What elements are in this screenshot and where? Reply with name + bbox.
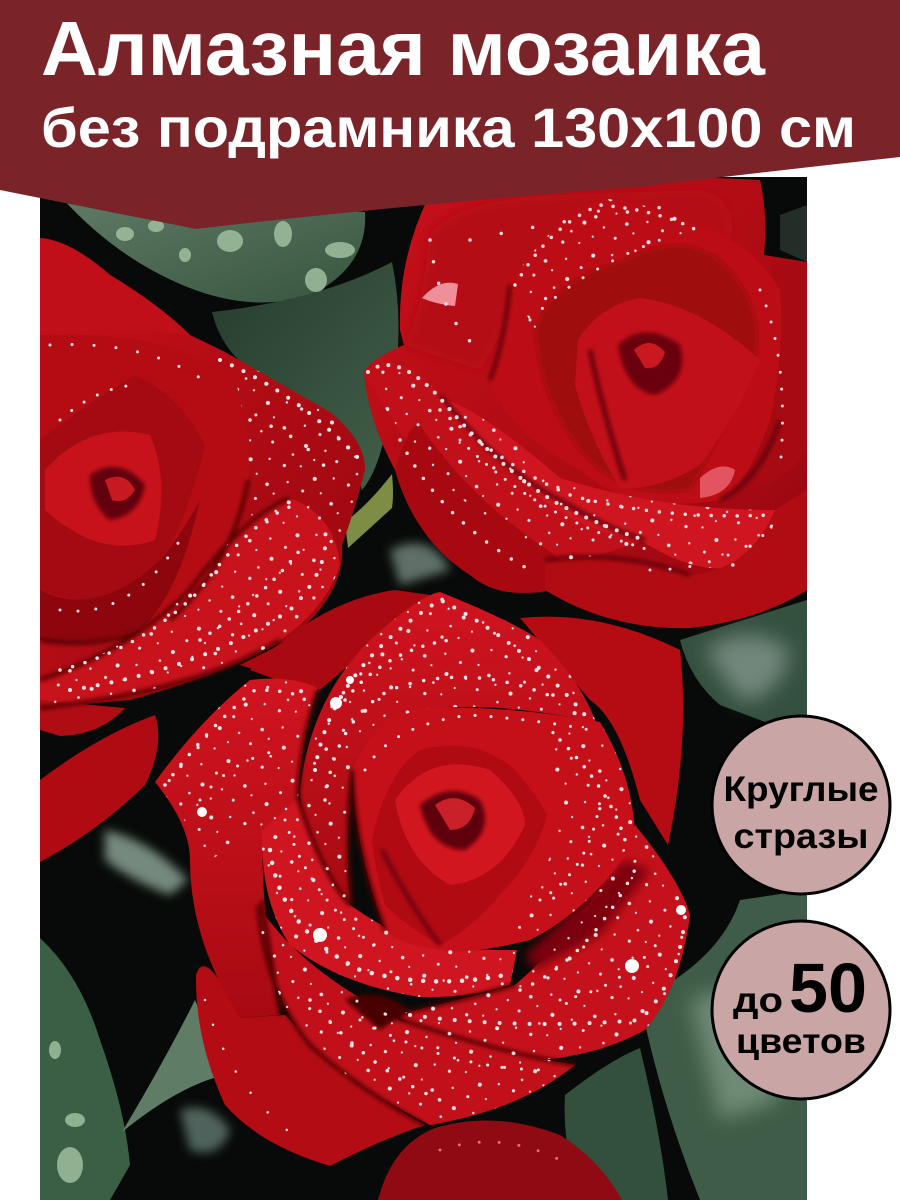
badge: round rhinestones xyxy=(712,716,890,894)
dew xyxy=(165,600,685,1140)
front petals xyxy=(364,363,645,560)
badge: round rhinestones: стразы xyxy=(734,817,868,856)
badge: up to 50 colours xyxy=(712,921,890,1099)
back left sliver xyxy=(240,590,430,690)
rose: bottom edge xyxy=(378,1120,622,1200)
title: Алмазная мозаика xyxy=(41,6,766,92)
bud xyxy=(372,746,547,945)
dew xyxy=(368,205,782,570)
dew speckle xyxy=(364,198,775,568)
lowest petal xyxy=(196,966,425,1166)
large droplets xyxy=(197,676,686,973)
dew xyxy=(50,344,360,690)
badge: up to 50 colours: цветов xyxy=(736,1022,866,1061)
outer petals xyxy=(364,177,807,628)
rose: top right xyxy=(364,177,807,628)
dark creases xyxy=(440,285,780,575)
dark creases xyxy=(258,690,575,1125)
dew speckle xyxy=(54,370,359,704)
front petal xyxy=(40,498,340,708)
back right petal xyxy=(520,617,683,845)
header banner xyxy=(0,0,900,229)
badge: round rhinestones: Круглые xyxy=(724,770,878,809)
subtitle: без подрамника 130х100 см xyxy=(41,96,856,159)
right shadow xyxy=(750,262,807,490)
front low petal xyxy=(262,798,517,997)
dark hollow xyxy=(345,994,410,1030)
bud xyxy=(40,375,205,599)
rose: bottom centre xyxy=(155,590,690,1166)
dark gap xyxy=(525,860,650,970)
badge: up to 50 colours: 50 xyxy=(789,949,867,1027)
photo: red roses with dew xyxy=(40,177,807,1200)
pink highlights xyxy=(422,283,458,306)
inner bud xyxy=(575,298,760,488)
leaves behind the roses xyxy=(40,198,807,1200)
leaf droplets xyxy=(49,220,355,1183)
left petal xyxy=(155,679,318,1018)
low sweep petal xyxy=(258,905,575,1125)
mid petal xyxy=(506,238,782,504)
badge: up to 50 colours: до xyxy=(733,981,783,1020)
right low petal xyxy=(395,825,690,1060)
title block xyxy=(41,6,856,159)
centre cup xyxy=(352,708,635,951)
dew speckle xyxy=(155,592,690,1125)
rose: left xyxy=(40,238,395,862)
dark creases xyxy=(40,480,290,708)
top petal xyxy=(300,592,596,905)
